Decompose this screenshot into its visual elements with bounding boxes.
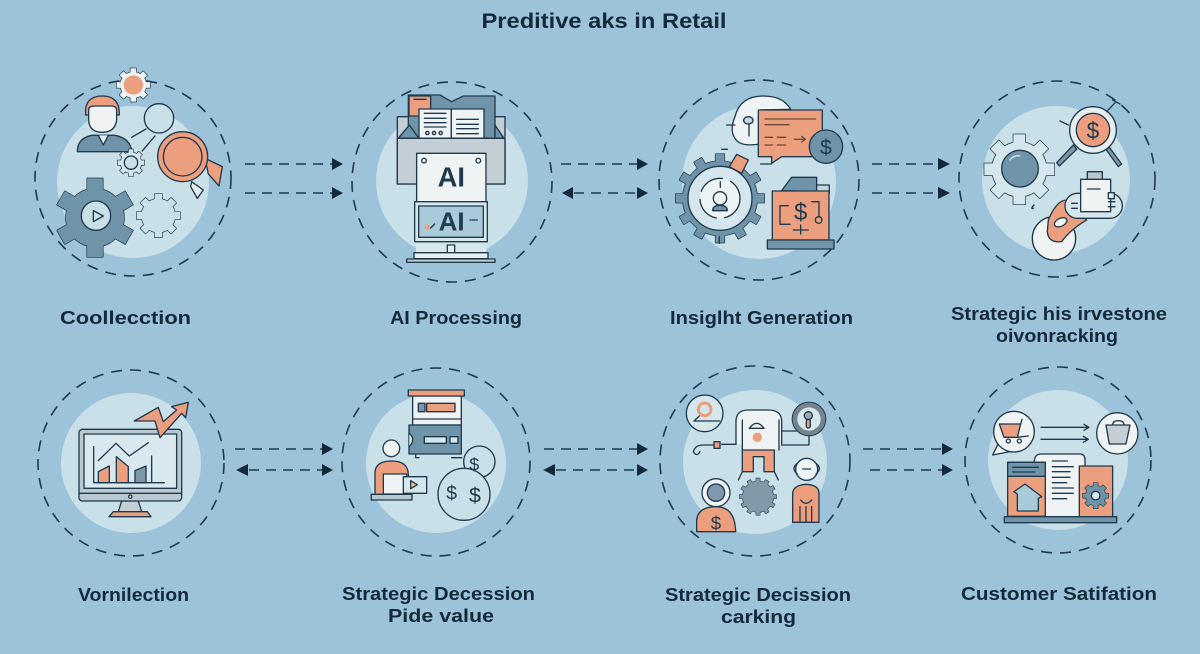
icon: monitor with chart bbox=[79, 402, 188, 517]
label: strategic decision making bbox=[665, 585, 851, 627]
label: strategic tracking bbox=[951, 304, 1167, 346]
icon: machine, person and coins: $ bbox=[469, 484, 481, 508]
label: strategic decision value bbox=[342, 584, 535, 626]
panel: strategic decision value bbox=[342, 368, 530, 556]
label: customer satisfaction: Customer Satifation bbox=[961, 584, 1157, 604]
icon: gear, speech bubble and document: $ bbox=[794, 199, 807, 226]
arrows: decision making to customer satisfaction bbox=[863, 443, 953, 476]
icon: figures, gear and connections bbox=[686, 395, 826, 533]
panel: AI processing bbox=[352, 82, 552, 282]
arrows: AI processing to insight generation bbox=[561, 158, 648, 199]
icon: printer and monitor: AI bbox=[439, 207, 465, 237]
icon: machine, person and coins bbox=[371, 390, 495, 520]
title: Preditive aks in Retail bbox=[482, 10, 726, 33]
icon: gear, speech bubble and document: $ bbox=[820, 135, 832, 159]
label: AI processing: AI Processing bbox=[390, 308, 522, 328]
arrows: collection to AI processing bbox=[245, 158, 343, 199]
arrows: insight generation to strategic tracking bbox=[872, 158, 950, 199]
icon: machine, person and coins: $ bbox=[446, 484, 457, 505]
icon: gear, speech bubble and document bbox=[676, 96, 843, 249]
panel: strategic decision making bbox=[660, 366, 850, 556]
icon: gear, magnifier and hand bbox=[984, 100, 1122, 260]
icon: people, gears and medal bbox=[57, 68, 222, 257]
icon: printer and monitor bbox=[397, 95, 505, 262]
panel: customer satisfaction bbox=[965, 367, 1151, 553]
icon: carts, arrows and storefront bbox=[993, 411, 1138, 523]
icon: machine, person and coins: $ bbox=[469, 455, 479, 475]
label: collection: Coollecction bbox=[60, 308, 191, 328]
label: strategic tracking: oivonracking bbox=[996, 326, 1118, 346]
panel: insight generation bbox=[659, 80, 859, 280]
icon: printer and monitor: AI bbox=[438, 162, 465, 193]
arrows: strategic decision to decision making bbox=[543, 443, 648, 476]
arrows: monitoring to strategic decision bbox=[235, 443, 333, 476]
panel: monitoring bbox=[38, 370, 224, 556]
label: strategic decision making: carking bbox=[721, 607, 796, 627]
icon: gear, magnifier and hand: $ bbox=[1087, 117, 1100, 143]
label: strategic decision value: Strategic Decession bbox=[342, 584, 535, 604]
label: monitoring: Vornilection bbox=[78, 585, 189, 605]
label: insight generation: Insiglht Generation bbox=[670, 308, 853, 328]
label: strategic decision value: Pide value bbox=[388, 606, 494, 626]
panel: strategic tracking bbox=[959, 81, 1155, 277]
icon: figures, gear and connections: $ bbox=[711, 512, 722, 533]
label: strategic tracking: Strategic his irvestone bbox=[951, 304, 1167, 324]
panel: collection bbox=[35, 68, 231, 276]
label: strategic decision making: Strategic Decission bbox=[665, 585, 851, 605]
